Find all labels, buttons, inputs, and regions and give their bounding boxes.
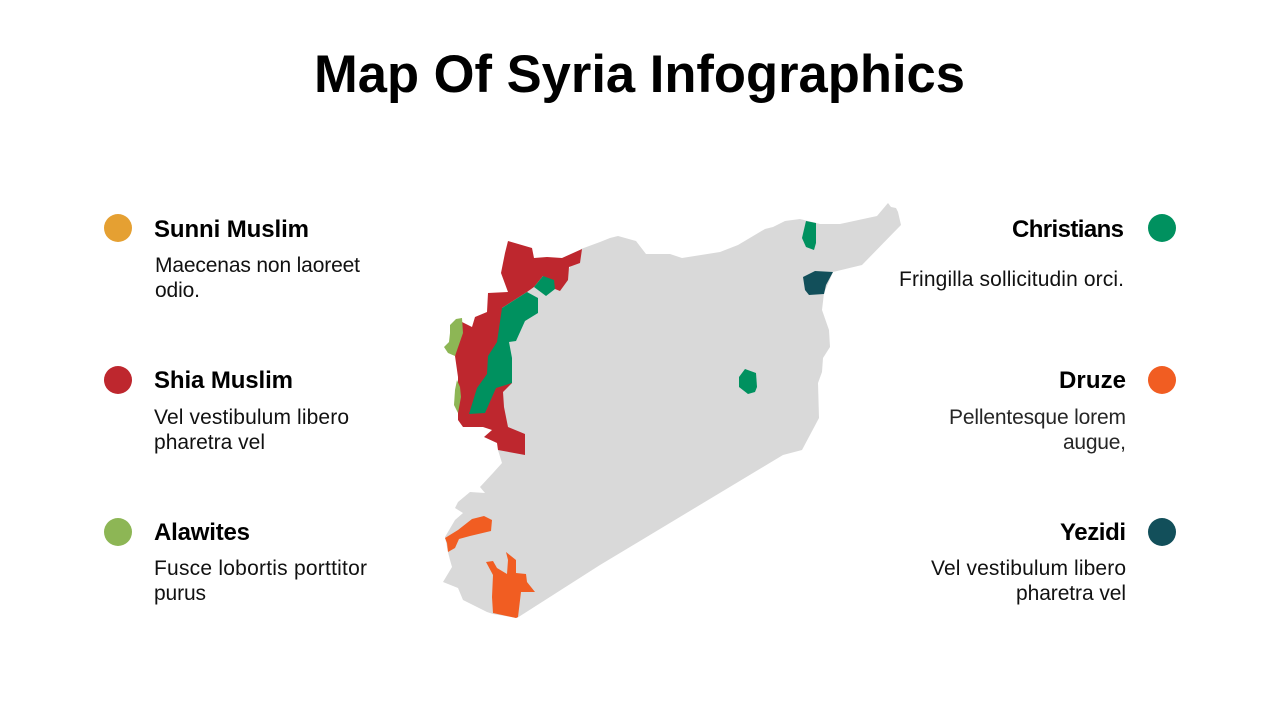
map of Syria (443, 203, 901, 618)
description: purus (154, 582, 206, 605)
heading: Sunni Muslim (154, 216, 309, 243)
region: Shia Muslim (455, 241, 582, 455)
icon: teal dot (1148, 518, 1176, 546)
icon: amber dot (104, 214, 132, 242)
description: Vel vestibulum libero (154, 406, 349, 429)
heading: Christians (1012, 216, 1124, 243)
heading: Druze (1059, 367, 1126, 394)
description: Fringilla sollicitudin orci. (899, 268, 1124, 291)
region: Christians north-west lower (469, 292, 538, 414)
description: pharetra vel (1016, 582, 1126, 605)
description (154, 406, 349, 454)
region: Christians east (739, 369, 757, 394)
legend: Sunni Muslim (104, 214, 360, 302)
legend: Shia Muslim (104, 366, 349, 454)
region: Christians north-east (802, 221, 816, 250)
legend: Yezidi (931, 518, 1176, 605)
legend: Alawites (104, 518, 367, 605)
heading: Yezidi (1060, 519, 1126, 546)
title: Map Of Syria Infographics (314, 45, 965, 104)
description: Maecenas non laoreet (155, 254, 360, 277)
region: Christians north-west upper (534, 276, 555, 296)
icon: red dot (104, 366, 132, 394)
region: Druze west (445, 516, 492, 552)
region: Druze south (486, 552, 535, 618)
legend: Druze (949, 366, 1176, 454)
description: pharetra vel (154, 431, 265, 454)
description (931, 557, 1126, 605)
description: augue, (1063, 431, 1126, 454)
heading: Shia Muslim (154, 367, 293, 394)
description (155, 254, 360, 302)
description: Vel vestibulum libero (931, 557, 1126, 580)
region: Alawites south (454, 380, 461, 413)
description (154, 557, 367, 605)
heading: Alawites (154, 519, 250, 546)
icon: green dot (104, 518, 132, 546)
legend: Christians (899, 214, 1176, 291)
description: odio. (155, 279, 200, 302)
icon: emerald dot (1148, 214, 1176, 242)
icon: orange dot (1148, 366, 1176, 394)
map base shape (443, 203, 901, 618)
description: Fusce lobortis porttitor (154, 557, 367, 580)
description (949, 406, 1126, 454)
region: Yezidi (803, 271, 833, 295)
region: Alawites north (444, 318, 463, 356)
description: Pellentesque lorem (949, 406, 1126, 429)
